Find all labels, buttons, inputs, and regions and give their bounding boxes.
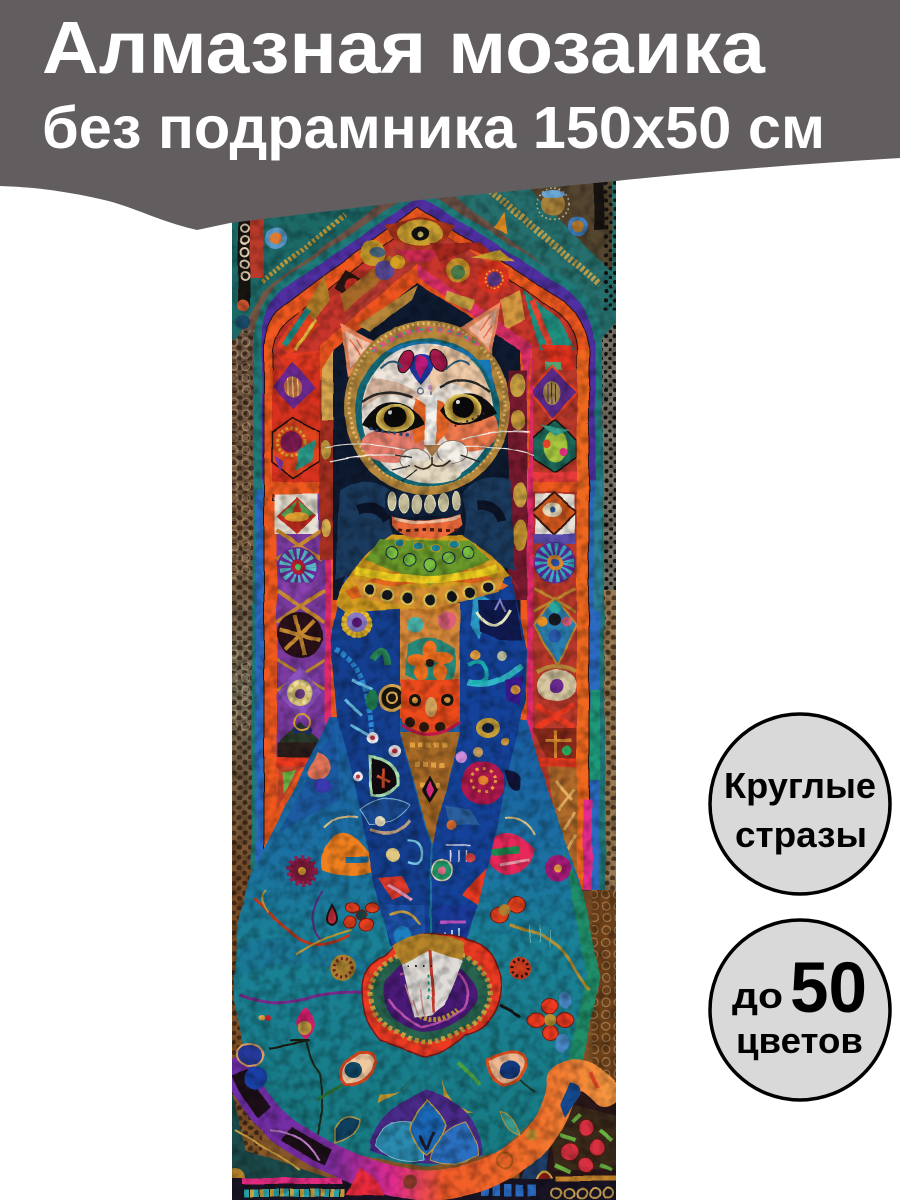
- orange arch frame: [264, 207, 589, 890]
- badge: up to 50 colours: [710, 920, 890, 1100]
- lower right dark flowers corner: [520, 1092, 616, 1179]
- cat tail: [237, 1044, 605, 1195]
- title line 1: Алмазная мозаика: [42, 6, 766, 89]
- whiskers: [326, 431, 534, 482]
- face: [355, 338, 500, 487]
- headdress halo: [344, 321, 510, 495]
- right eye: [440, 381, 497, 424]
- badge: round rhinestones: Круглые: [724, 765, 876, 806]
- painting: cat in ornate arch: [220, 165, 632, 1200]
- speckled background: [232, 196, 616, 1178]
- forehead flower: [380, 348, 470, 395]
- right arm sleeve: [432, 575, 527, 955]
- centre flower with white paws: [362, 934, 501, 1057]
- tympanum ornament panel: [273, 217, 577, 500]
- left eye: [362, 392, 425, 433]
- upper right corner ornament: [456, 181, 616, 338]
- badge: up to 50 colours: 50: [790, 949, 867, 1028]
- chest necklace: [336, 535, 518, 612]
- right panel column motifs: [527, 350, 592, 890]
- upper left corner ornament: [232, 205, 378, 340]
- outer teal and purple arch bands: [251, 188, 606, 890]
- blue lotus at skirt base: [370, 1090, 482, 1164]
- sleeve cuff and paws: [392, 934, 465, 1017]
- badge: round rhinestones: стразы: [735, 814, 867, 855]
- skirt flowers and motifs: [240, 752, 590, 1143]
- blue-teal skirt: [234, 717, 600, 1167]
- badge: up to 50 colours: цветов: [736, 1020, 863, 1061]
- left arm sleeve: [330, 575, 430, 955]
- left panel column motifs: [272, 362, 331, 808]
- bottom ornamental strip: [220, 1176, 632, 1200]
- badge: up to 50 colours: до: [732, 975, 783, 1016]
- cheeks: [361, 427, 425, 463]
- title banner: [0, 0, 900, 230]
- inner arch band and dark hood: [320, 264, 532, 620]
- title line 2: без подрамника 150х50 см: [42, 95, 825, 161]
- badge: round rhinestones: [710, 714, 890, 894]
- centre panel and gold dart: [400, 603, 460, 845]
- beaded collar: [385, 490, 463, 538]
- cat head: [326, 302, 534, 495]
- ears: [340, 302, 500, 378]
- muzzle: [400, 448, 430, 467]
- lower left corner ornament: [232, 1092, 330, 1178]
